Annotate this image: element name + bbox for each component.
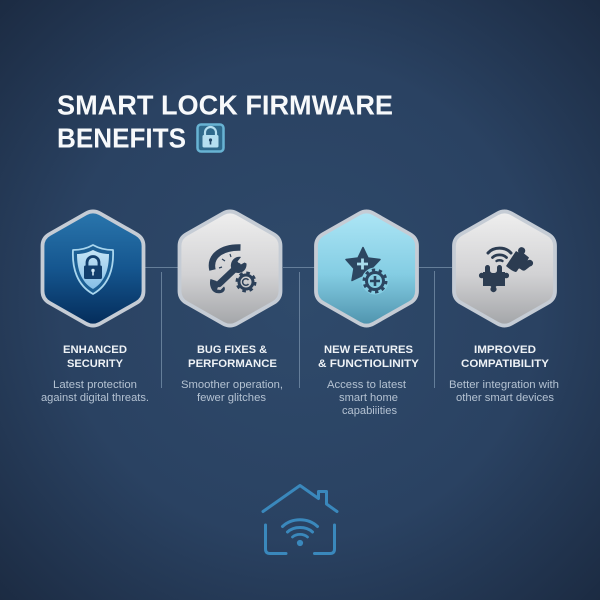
description: Smoother operation, bbox=[181, 379, 283, 391]
description: Access to latest bbox=[327, 379, 406, 391]
icon: title padlock bbox=[198, 124, 224, 152]
description: smart home bbox=[339, 392, 398, 404]
hexagon: blue bbox=[42, 211, 144, 326]
description bbox=[41, 379, 149, 404]
description: against digital threats. bbox=[41, 392, 149, 404]
heading bbox=[318, 344, 420, 370]
icon: shield with lock bbox=[73, 245, 113, 294]
heading: BUG FIXES & bbox=[197, 344, 267, 356]
description: fewer glitches bbox=[197, 392, 266, 404]
title bbox=[57, 90, 393, 154]
hexagon: silver bbox=[454, 211, 555, 326]
description: Better integration with bbox=[449, 379, 559, 391]
title: BENEFITS bbox=[57, 122, 186, 154]
description: Latest protection bbox=[53, 379, 137, 391]
panel: new features and functionality bbox=[316, 211, 420, 417]
description bbox=[327, 379, 406, 417]
hexagon: silver bbox=[180, 211, 280, 326]
heading bbox=[63, 344, 127, 370]
icon: smart home with wifi bbox=[263, 486, 337, 554]
heading: IMPROVED bbox=[474, 344, 536, 356]
panel: improved compatibility bbox=[449, 211, 559, 404]
panel: bug fixes and performance bbox=[180, 211, 283, 404]
description: other smart devices bbox=[456, 392, 555, 404]
connector lines bbox=[145, 268, 452, 388]
icon: wifi and puzzle pieces bbox=[479, 247, 533, 292]
heading bbox=[461, 344, 550, 370]
hexagon: cyan bbox=[316, 211, 417, 326]
heading: PERFORMANCE bbox=[188, 358, 277, 370]
description bbox=[181, 379, 283, 404]
heading: & FUNCTIOLINITY bbox=[318, 358, 420, 370]
heading: NEW FEATURES bbox=[324, 344, 413, 356]
description: capabiiities bbox=[342, 405, 398, 417]
heading: SECURITY bbox=[67, 358, 124, 370]
description bbox=[449, 379, 559, 404]
panel: enhanced security bbox=[41, 211, 149, 404]
heading: COMPATIBILITY bbox=[461, 358, 550, 370]
title: SMART LOCK FIRMWARE bbox=[57, 90, 393, 120]
heading bbox=[188, 344, 277, 370]
icon: gauge, wrench and gear bbox=[210, 247, 255, 293]
icon: star and gear with plus bbox=[346, 248, 388, 294]
heading: ENHANCED bbox=[63, 344, 127, 356]
